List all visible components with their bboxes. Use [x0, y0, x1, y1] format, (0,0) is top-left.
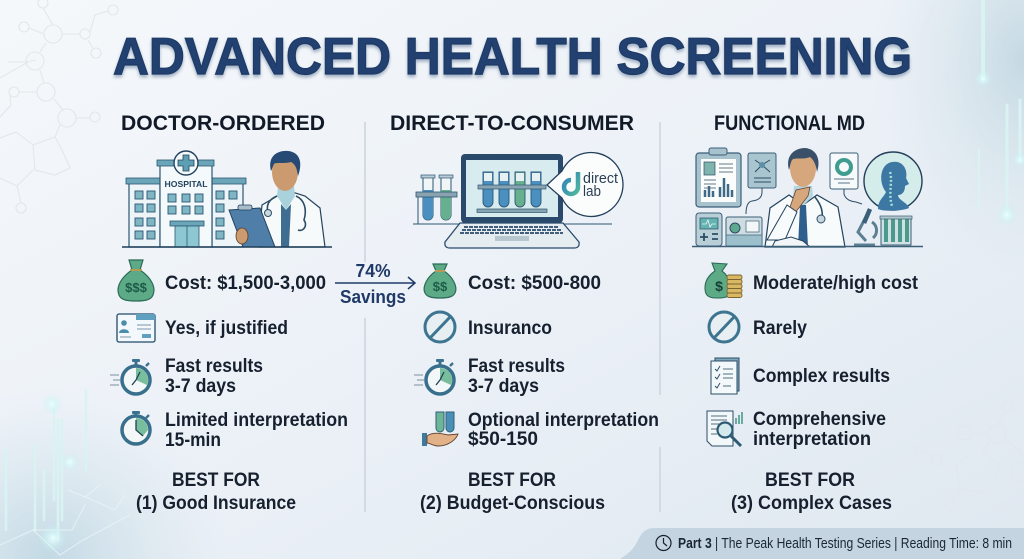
text: comprehensive interpretation: interpretation [753, 429, 871, 450]
text: optional interpretation [468, 410, 659, 450]
illustration: laptop with test tubes and direct lab logo: direct [583, 170, 619, 187]
illustration: hospital and doctor [122, 151, 332, 247]
text: cost: Cost: $500-800 [468, 273, 601, 294]
best for: complex cases: BEST FOR [765, 470, 855, 491]
text: results speed: 3-7 days [165, 376, 236, 397]
icon: stopwatch fast [110, 359, 150, 394]
savings arrow callout [335, 261, 415, 307]
best for: complex cases [731, 470, 892, 514]
best for: budget-conscious: BEST FOR [468, 470, 556, 491]
text: interpretation [165, 410, 348, 451]
text: complex results: Complex results [753, 366, 890, 387]
text: results speed: Fast results [468, 356, 565, 377]
icon: checklist documents [711, 358, 739, 394]
icon: money bag: $$$ [125, 280, 148, 295]
best for: complex cases: (3) Complex Cases [731, 493, 892, 514]
savings arrow callout: Savings [340, 287, 406, 307]
icon: no insurance [425, 312, 455, 342]
text: cost: Cost: $1,500-3,000 [165, 273, 326, 294]
icon: stopwatch fast [414, 359, 454, 394]
footer bar [620, 528, 1024, 559]
icon: money bag and coins: $ [715, 278, 723, 294]
text: interpretation: 15-min [165, 430, 221, 451]
heading: doctor-ordered: DOCTOR-ORDERED [121, 112, 325, 135]
heading: functional md: FUNCTIONAL MD [714, 112, 865, 135]
icon: money bag: $$ [433, 279, 448, 294]
icon: hand holding tubes [422, 412, 458, 446]
illustration: laptop with test tubes and direct lab logo: lab [583, 183, 601, 200]
icon: money bag and coins [705, 263, 742, 298]
best for: budget-conscious [420, 470, 605, 514]
icon: insurance card [117, 314, 155, 342]
illustration: laptop with test tubes and direct lab logo [413, 152, 623, 248]
text: results speed [165, 356, 263, 397]
panel: direct-to-consumer [390, 112, 659, 514]
icon: report with magnifier [707, 411, 742, 446]
panel: functional md [692, 112, 923, 514]
icon: rarely covered [709, 312, 739, 342]
text: cost: Moderate/high cost [753, 273, 919, 294]
text: rarely: Rarely [753, 318, 807, 339]
best for: good insurance: (1) Good Insurance [136, 493, 296, 514]
icon: money bag [424, 264, 456, 298]
text: interpretation: Limited interpretation [165, 410, 348, 431]
icon: money bag [118, 260, 154, 301]
text: results speed: Fast results [165, 356, 263, 377]
text: insurance coverage: Yes, if justified [165, 318, 288, 339]
text: results speed [468, 356, 565, 397]
text: comprehensive interpretation [753, 409, 886, 450]
text: optional interpretation: $50-150 [468, 429, 538, 450]
title: ADVANCED HEALTH SCREENING [113, 28, 912, 86]
heading: direct-to-consumer: DIRECT-TO-CONSUMER [390, 112, 634, 135]
icon: clock [656, 536, 671, 550]
illustration: hospital and doctor: HOSPITAL [164, 179, 208, 189]
panel: doctor-ordered [110, 112, 348, 514]
text: comprehensive interpretation: Comprehensive [753, 409, 886, 430]
best for: good insurance [136, 470, 296, 514]
text: optional interpretation: Optional interpretation [468, 410, 659, 431]
icon: stopwatch 15 minutes [122, 411, 150, 444]
illustration: functional doctor with diagnostics [692, 148, 923, 247]
text: insurance: Insuranco [468, 318, 552, 339]
best for: budget-conscious: (2) Budget-Conscious [420, 493, 605, 514]
text: results speed: 3-7 days [468, 376, 539, 397]
savings arrow callout: 74% [356, 261, 390, 281]
best for: good insurance: BEST FOR [172, 470, 260, 491]
